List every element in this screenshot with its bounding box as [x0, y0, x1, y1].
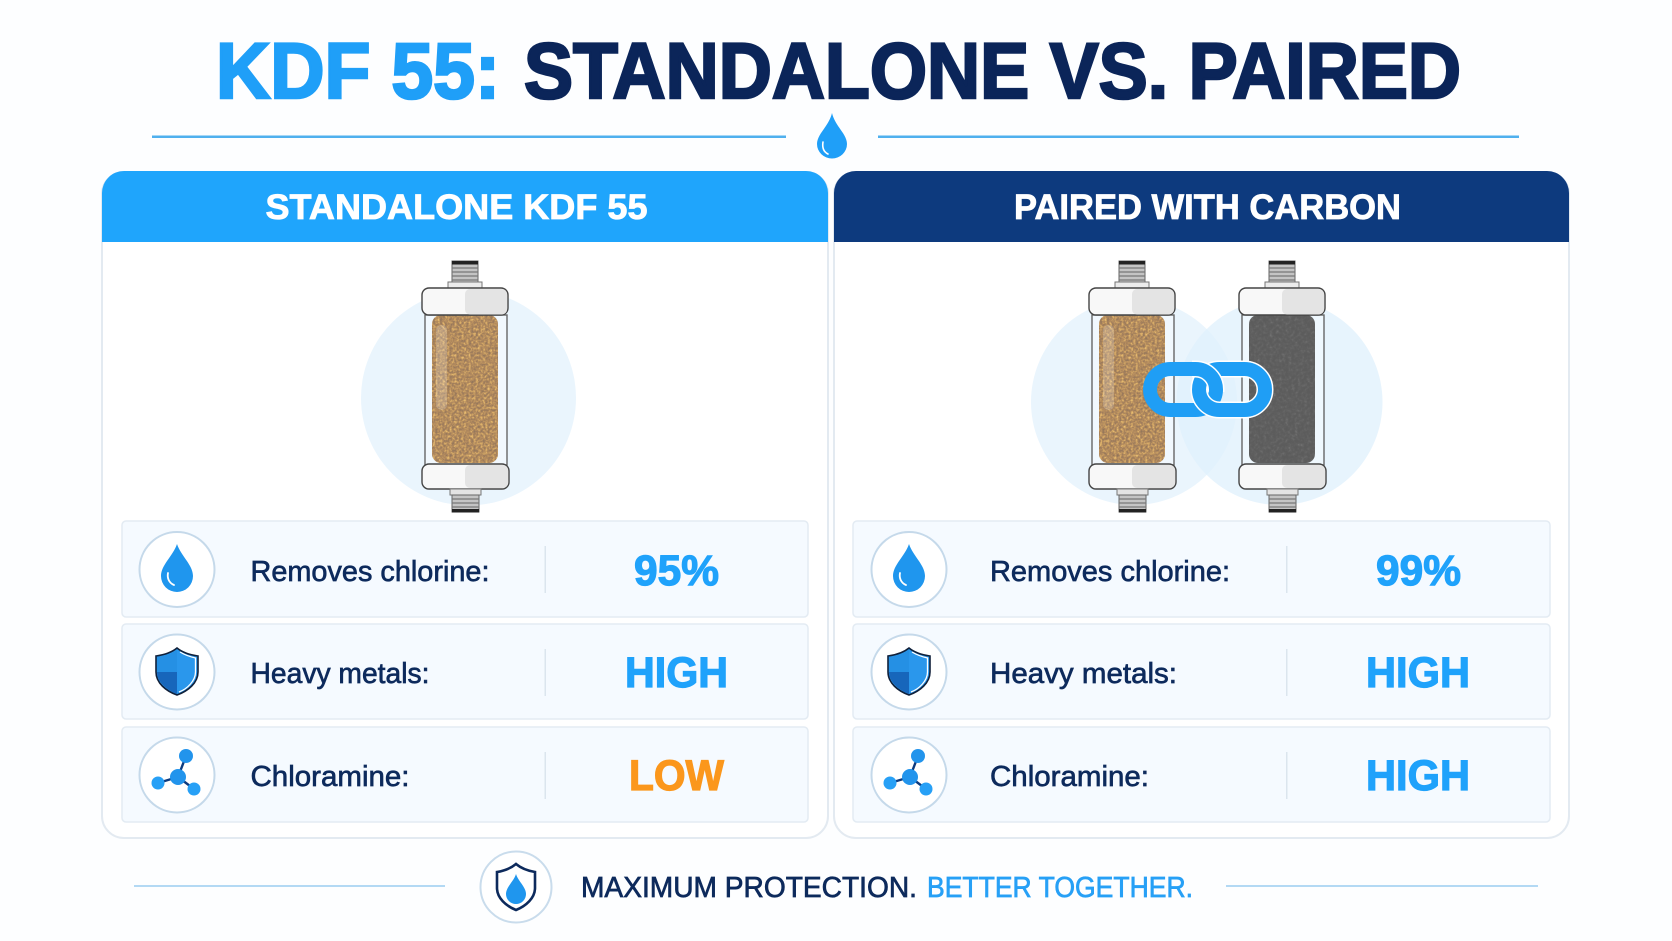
panel header: standalone — [102, 171, 828, 242]
tagline text: MAXIMUM PROTECTION. — [581, 872, 917, 904]
title: STANDALONE VS. PAIRED — [524, 26, 1461, 115]
row: heavy metals HIGH — [853, 624, 1550, 719]
row: removes chlorine 99%: Removes chlorine: — [990, 556, 1230, 588]
title: KDF 55: — [216, 26, 500, 115]
heading: paired: PAIRED WITH CARBON — [1014, 188, 1401, 227]
row: heavy metals HIGH: Heavy metals: — [990, 658, 1177, 690]
row: chloramine HIGH — [853, 727, 1550, 822]
panel: standalone KDF 55 — [102, 171, 828, 838]
icon: chain link — [1150, 369, 1265, 410]
row: heavy metals HIGH: HIGH — [1366, 649, 1470, 697]
illustration: KDF 55 filter — [361, 261, 576, 512]
row: heavy metals HIGH: HIGH — [625, 649, 728, 697]
icon: title water drop — [817, 113, 847, 158]
row: chloramine LOW: Chloramine: — [250, 761, 410, 793]
illustration: linked KDF and carbon filters — [1031, 261, 1382, 512]
row: removes chlorine 95%: Removes chlorine: — [250, 556, 490, 588]
row: chloramine LOW: LOW — [629, 752, 724, 800]
filter: carbon — [1239, 261, 1326, 512]
footer tagline — [480, 852, 1193, 922]
row: chloramine HIGH: HIGH — [1366, 752, 1470, 800]
row: chloramine HIGH: Chloramine: — [990, 761, 1149, 793]
row: removes chlorine 95%: 95% — [634, 547, 719, 595]
heading: standalone: STANDALONE KDF 55 — [266, 188, 648, 227]
filter: KDF 55 — [1089, 261, 1176, 512]
icon: shield with water drop — [480, 852, 552, 922]
footer tagline: BETTER TOGETHER. — [927, 872, 1193, 904]
panel: paired with carbon — [834, 171, 1569, 838]
row: removes chlorine 99%: 99% — [1376, 547, 1461, 595]
row: heavy metals HIGH: Heavy metals: — [250, 658, 430, 690]
row: removes chlorine 99% — [853, 521, 1550, 617]
row: heavy metals HIGH — [122, 624, 808, 719]
panel header: paired — [834, 171, 1569, 242]
row: removes chlorine 95% — [122, 521, 808, 617]
row: chloramine LOW — [122, 727, 808, 822]
